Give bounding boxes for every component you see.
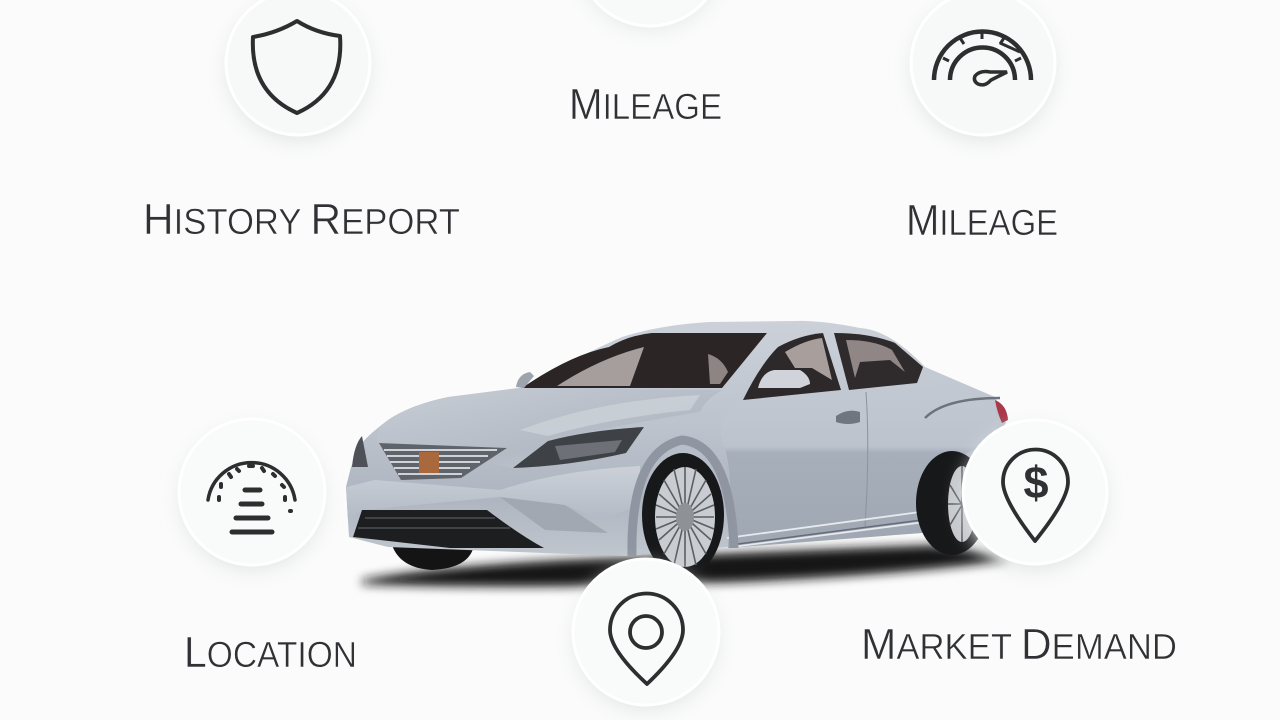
icon badge: left gauge — [179, 419, 325, 570]
windshield reflection — [557, 347, 644, 386]
headlight — [513, 427, 644, 468]
icon badge: mileage gauge — [911, 0, 1055, 141]
car ground shadow — [362, 545, 1010, 587]
lower air intake — [353, 510, 544, 548]
front side window — [743, 333, 841, 400]
icon badge: location pin — [573, 559, 719, 710]
rear arch crease — [925, 398, 1000, 418]
door handle — [836, 411, 860, 424]
car illustration — [346, 321, 1010, 587]
icon: speedometer — [934, 31, 1031, 85]
windshield — [522, 333, 767, 388]
icon: dollar pin — [1003, 450, 1068, 541]
side mirror — [758, 370, 810, 388]
icon: gauge with bars — [208, 463, 295, 532]
icon: shield — [253, 21, 340, 113]
icon badge: top center (cropped) — [578, 0, 722, 30]
dollar sign: $ — [1023, 457, 1049, 508]
left mirror — [516, 372, 534, 388]
door side panel — [720, 384, 1000, 548]
icon badge: market demand pin — [963, 420, 1107, 570]
front grille — [379, 443, 507, 480]
rear side window — [834, 333, 923, 390]
bumper side vent — [500, 497, 608, 533]
heading label: Mileage (right): MILEAGE — [906, 196, 1058, 245]
far front tyre — [392, 545, 474, 570]
near headlight edge — [352, 436, 368, 467]
icon: map pin — [610, 593, 683, 684]
hood crease highlight — [520, 395, 700, 436]
car body — [346, 321, 1006, 556]
icon badge: history report shield — [226, 0, 370, 141]
door seam — [865, 392, 868, 526]
heading label: Market Demand: MARKET DEMAND — [861, 620, 1177, 669]
front bumper highlight — [346, 466, 640, 520]
rear wheel — [916, 451, 988, 555]
tail light — [995, 400, 1008, 423]
front wheel — [632, 440, 734, 577]
heading label: Mileage (top center): MILEAGE — [569, 80, 722, 129]
heading label: Location: LOCATION — [184, 628, 357, 677]
heading label: History Report: HISTORY REPORT — [143, 195, 460, 244]
grille badge — [419, 452, 439, 473]
hood panel — [377, 388, 722, 468]
sill line — [727, 512, 925, 547]
